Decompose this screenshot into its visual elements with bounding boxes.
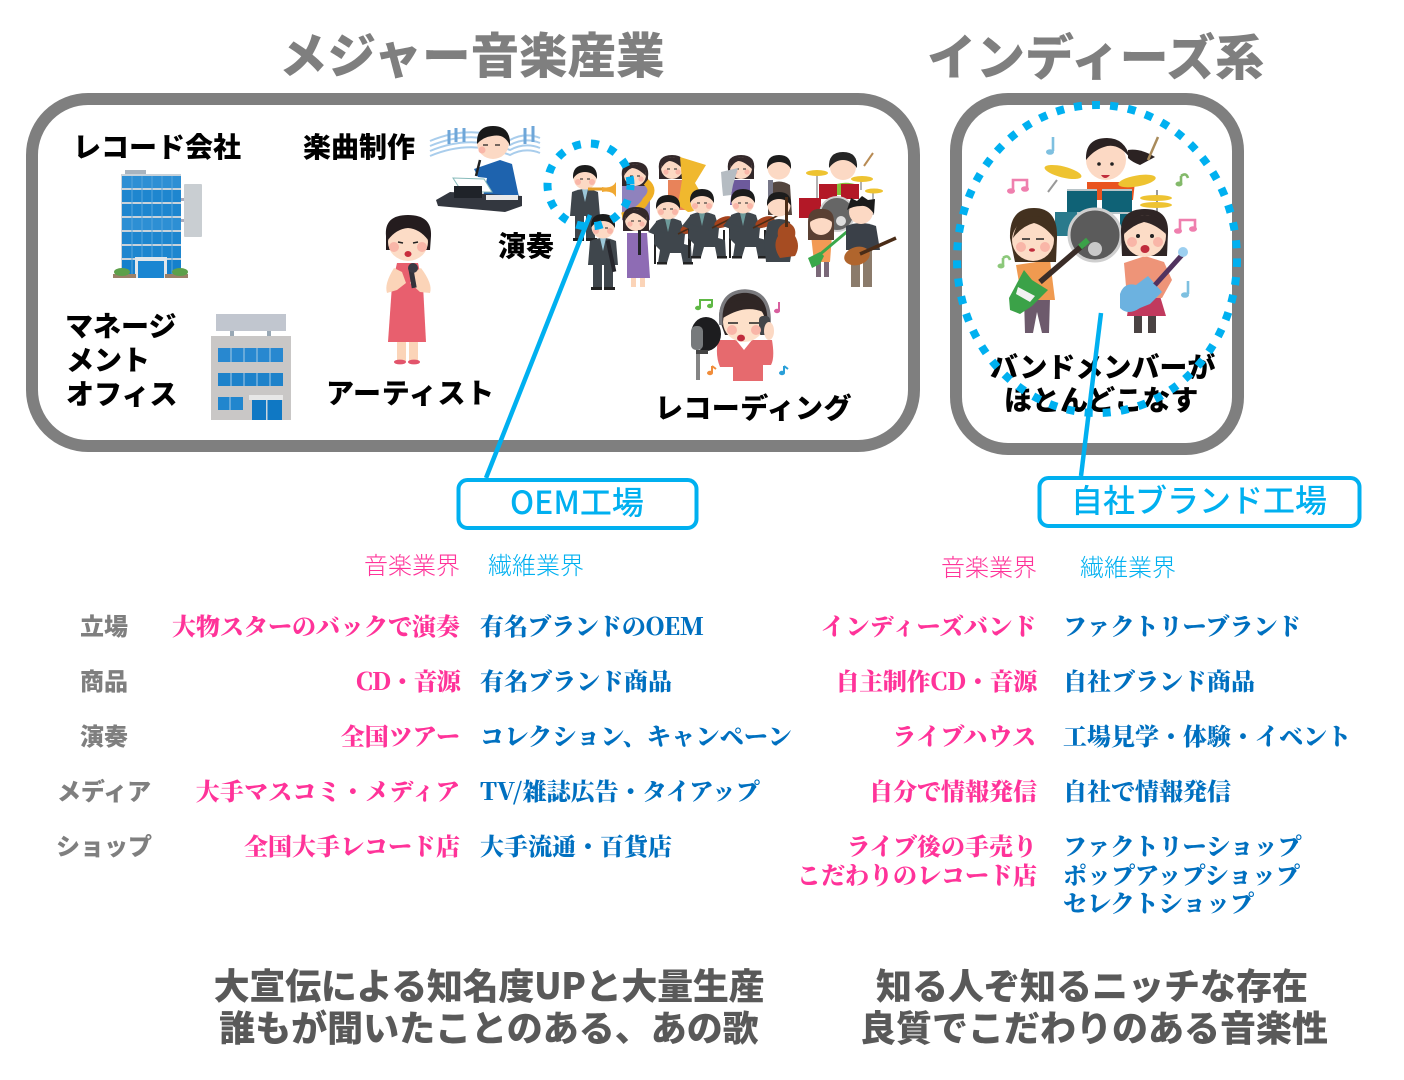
icon: tuba woman — [659, 155, 706, 212]
icon: music notes — [998, 137, 1197, 298]
icon: clarinet man — [588, 214, 618, 290]
row labels: メディア — [57, 772, 151, 807]
icon: clarinet woman — [623, 207, 650, 287]
icon: record company building — [113, 170, 202, 278]
comparison: major textile column — [480, 607, 792, 862]
row labels: 商品 — [80, 662, 128, 697]
icon: indie band — [998, 137, 1197, 333]
comparison: indie music column: ライブハウス — [892, 717, 1037, 752]
icon: management office building — [211, 314, 291, 420]
title: indies: インディーズ系 — [927, 19, 1264, 90]
comparison: indie textile column — [1063, 607, 1351, 919]
icon: recording singer — [691, 291, 788, 381]
label: artist: アーティスト — [326, 372, 495, 412]
comparison: indie music column: こだわりのレコード店 — [797, 856, 1037, 891]
label: band members do almost everything: バンドメンバーが — [990, 346, 1215, 386]
label: recording: レコーディング — [655, 387, 852, 427]
comparison: major textile column: 大手流通・百貨店 — [480, 827, 672, 862]
comparison: indie textile column: ポップアップショップ — [1063, 856, 1300, 891]
icon: guitar girl — [808, 209, 849, 277]
comparison: indie textile column: セレクトショップ — [1063, 884, 1254, 919]
icon: saxophone woman — [622, 162, 651, 220]
dotted circle: trumpet highlight — [548, 144, 630, 226]
comparison: indie textile column: 自社で情報発信 — [1063, 772, 1231, 807]
comparison: major music column: 全国ツアー — [341, 717, 460, 752]
icon: singing man — [767, 155, 792, 215]
panel: indies band — [956, 99, 1238, 449]
summary: major: 誰もが聞いたことのある、あの歌 — [219, 1000, 759, 1052]
label: management office: メント — [66, 339, 150, 379]
row labels: 演奏 — [80, 717, 128, 752]
table headers right: 繊維業界 — [1080, 548, 1176, 583]
icon: euphonium woman — [721, 155, 754, 205]
comparison: major music column — [172, 607, 464, 862]
comparison: major textile column: コレクション、キャンペーン — [480, 717, 792, 752]
panel frame major — [32, 99, 914, 446]
icon: trumpet player — [570, 165, 616, 241]
table headers right: 音楽業界 — [941, 548, 1037, 583]
summary: major — [214, 958, 764, 1052]
summary: indies: 良質でこだわりのある音楽性 — [860, 1000, 1328, 1052]
icon: rock guitarist — [842, 196, 896, 287]
comparison: major music column: 全国大手レコード店 — [244, 827, 460, 862]
panel frame indies — [956, 99, 1238, 449]
icon: violinist 1 — [648, 195, 706, 264]
comparison: major music column: 大物スターのバックで演奏 — [172, 607, 463, 642]
summary: major: 大宣伝による知名度UPと大量生産 — [214, 958, 764, 1010]
label: band members do almost everything — [990, 346, 1215, 419]
arrow: pointer to own-brand factory — [1081, 313, 1101, 476]
comparison: indie music column — [797, 607, 1040, 891]
comparison: indie textile column: 工場見学・体験・イベント — [1063, 717, 1351, 752]
icon: drummer and drums — [1043, 137, 1172, 261]
comparison: indie music column: 自主制作CD・音源 — [836, 662, 1040, 697]
callout: own brand factory: 自社ブランド工場 — [1071, 476, 1327, 522]
table headers left: 音楽業界 — [364, 546, 460, 581]
table headers left — [364, 546, 584, 581]
comparison: indie music column: インディーズバンド — [821, 607, 1037, 642]
icon: singer artist — [386, 215, 431, 364]
comparison: indie music column: 自分で情報発信 — [869, 772, 1037, 807]
label: record company: レコード会社 — [73, 126, 241, 166]
callout: OEM factory: OEM工場 — [510, 478, 644, 524]
title: major music industry: メジャー音楽産業 — [279, 17, 665, 87]
comparison: major textile column: TV/雑誌広告・タイアップ — [480, 772, 760, 807]
panel: major music industry — [32, 99, 914, 446]
comparison: indie textile column: ファクトリーショップ — [1063, 827, 1302, 862]
callout: OEM factory — [458, 478, 696, 528]
row labels — [56, 607, 152, 862]
row labels: ショップ — [56, 827, 152, 862]
table headers left: 繊維業界 — [488, 546, 584, 581]
comparison: major music column: CD・音源 — [356, 662, 464, 697]
row labels: 立場 — [80, 607, 128, 642]
comparison: indie music column: ライブ後の手売り — [846, 827, 1037, 862]
arrow: pointer to OEM factory — [486, 215, 590, 478]
comparison: indie textile column: 自社ブランド商品 — [1063, 662, 1255, 697]
label: performance: 演奏 — [498, 225, 554, 265]
summary: indies: 知る人ぞ知るニッチな存在 — [876, 958, 1308, 1010]
label: management office: マネージ — [65, 305, 176, 345]
icon: violinist 3 — [723, 189, 781, 258]
icon: orchestra and band — [570, 152, 896, 290]
icon: violinist 2 — [682, 189, 740, 258]
icon: cellist — [764, 192, 798, 262]
comparison: major textile column: 有名ブランドのOEM — [480, 607, 704, 642]
dotted ellipse: band highlight — [957, 105, 1237, 413]
comparison: major textile column: 有名ブランド商品 — [480, 662, 672, 697]
label: band members do almost everything: ほとんどこなす — [1004, 379, 1198, 419]
label: management office: オフィス — [66, 373, 177, 413]
icon: composer at keyboard — [430, 126, 540, 212]
label: management office — [65, 305, 177, 413]
summary: indies — [860, 958, 1328, 1052]
label: composition: 楽曲制作 — [303, 126, 415, 166]
comparison: indie textile column: ファクトリーブランド — [1063, 607, 1301, 642]
comparison: major music column: 大手マスコミ・メディア — [196, 772, 460, 807]
icon: right guitarist — [1120, 209, 1188, 333]
icon: left guitarist — [1009, 208, 1088, 333]
icon: drum kit and drummer — [799, 152, 883, 231]
table headers right — [941, 548, 1176, 583]
